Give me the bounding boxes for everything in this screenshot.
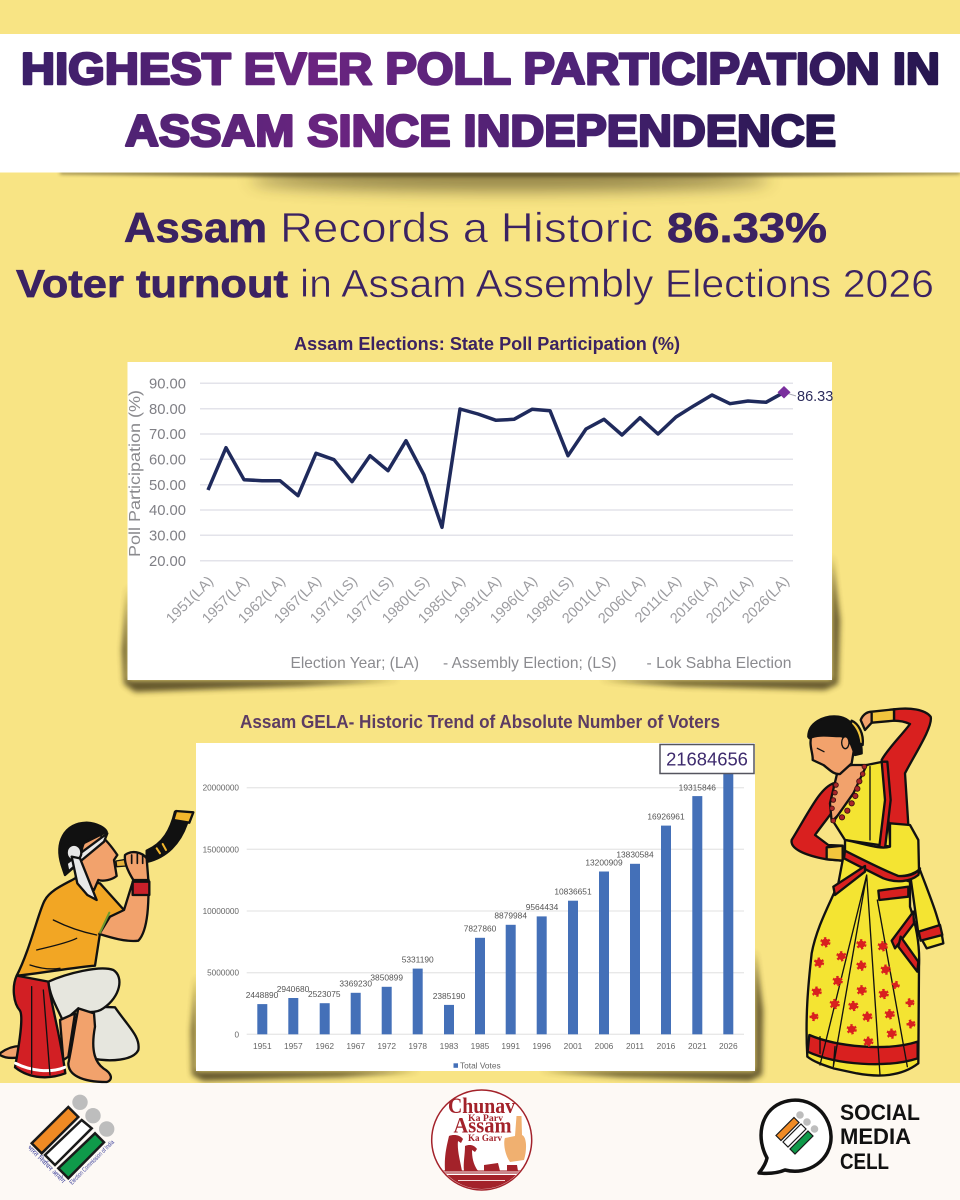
logo: Election Commission of India: भारत निर्वाचन आयोग <box>26 1144 67 1185</box>
subtitle: Voter turnout <box>16 263 288 306</box>
subtitle <box>16 204 934 306</box>
y axis labels: 90.00 <box>149 376 186 392</box>
legend: Total Votes <box>460 1061 501 1071</box>
bar x axis labels: 2021 <box>688 1041 707 1051</box>
x axis labels: 1991(LA) <box>451 574 505 627</box>
y axis labels: 70.00 <box>149 427 186 443</box>
bar value labels: 3369230 <box>339 979 372 989</box>
subtitle: Records a Historic <box>280 204 653 251</box>
bar x axis labels: 1983 <box>440 1041 459 1051</box>
x axis labels <box>163 574 793 627</box>
bar y axis labels: 20000000 <box>203 784 239 793</box>
bar y axis labels <box>203 784 239 1039</box>
bar value labels: 2940680 <box>277 984 310 994</box>
bar value labels: 9564434 <box>526 902 559 912</box>
y axis labels: 80.00 <box>149 402 186 418</box>
bar value labels: 19315846 <box>679 782 716 792</box>
bar value labels: 2448890 <box>246 990 279 1000</box>
x axis labels: 1996(LA) <box>487 574 541 627</box>
title line 2: ASSAM SINCE INDEPENDENCE <box>125 107 836 156</box>
saree flowers <box>811 939 914 1045</box>
x axis labels: 2026(LA) <box>739 574 793 627</box>
illustration: Bihu dancer <box>792 709 943 1076</box>
bar value labels: 2523075 <box>308 989 341 999</box>
bar value labels: 7827860 <box>464 924 497 934</box>
x axis labels: 1957(LA) <box>199 574 253 627</box>
logo: Social Media Cell: MEDIA <box>840 1124 911 1149</box>
bar value labels: 13830584 <box>616 849 654 859</box>
bar x axis labels: 2011 <box>626 1041 644 1051</box>
logo: Chunav Ka Parv Assam Ka Garv: Assam <box>454 1113 512 1138</box>
subtitle: Assam <box>124 204 267 251</box>
bar x axis labels: 2026 <box>719 1041 738 1051</box>
y axis title: Poll Participation (%) <box>127 390 144 557</box>
bar x axis labels: 2016 <box>657 1041 676 1051</box>
x axis labels: 1951(LA) <box>163 574 217 627</box>
line chart heading: Assam Elections: State Poll Participation (%) <box>294 334 680 354</box>
y axis labels: 60.00 <box>149 452 186 468</box>
bar value labels: 3850899 <box>370 972 403 982</box>
bars <box>257 767 733 1034</box>
bar x axis labels: 1996 <box>532 1041 551 1051</box>
x axis labels: 1985(LA) <box>415 574 469 627</box>
x axis labels: 2001(LA) <box>559 574 613 627</box>
subtitle: in Assam Assembly Elections 2026 <box>300 263 934 306</box>
title line 1: HIGHEST EVER POLL PARTICIPATION IN <box>21 45 940 94</box>
logo: Chunav Ka Parv Assam Ka Garv <box>430 1090 534 1195</box>
x axis labels: 1998(LS) <box>523 574 577 627</box>
bar x axis labels: 1991 <box>501 1041 520 1051</box>
footer band <box>0 1083 960 1200</box>
chart footnote: Election Year; (LA) <box>290 655 419 672</box>
subtitle: 86.33% <box>667 204 827 251</box>
bar x axis labels: 1957 <box>284 1041 303 1051</box>
x axis labels: 1971(LS) <box>307 574 361 627</box>
x axis labels: 2006(LA) <box>595 574 649 627</box>
bar y axis labels: 15000000 <box>203 845 239 854</box>
bar value labels: 16926961 <box>647 811 685 821</box>
bar value labels <box>246 782 716 1001</box>
bar x axis labels: 1985 <box>471 1041 490 1051</box>
2026 marker and value: 86.33 <box>797 389 833 405</box>
illustration: man blowing horn <box>0 811 193 1082</box>
bar x axis labels: 2006 <box>595 1041 614 1051</box>
x axis labels: 1977(LS) <box>343 574 397 627</box>
bar y axis labels: 0 <box>234 1030 239 1039</box>
header banner <box>0 34 960 191</box>
logo: Social Media Cell: CELL <box>840 1149 889 1174</box>
logo: Election Commission of India: Election Commission of India <box>68 1139 116 1186</box>
poll participation line <box>208 392 784 527</box>
bar value labels: 5331190 <box>402 955 434 965</box>
chart footnote <box>290 655 792 672</box>
bar x axis labels: 2001 <box>564 1041 583 1051</box>
necklace <box>830 764 867 823</box>
panel: bar chart <box>191 743 763 1081</box>
voting finger <box>504 1116 526 1162</box>
chart footnote: - Assembly Election; (LS) <box>443 655 616 672</box>
y axis labels: 50.00 <box>149 478 186 494</box>
bar x axis labels: 1962 <box>315 1041 334 1051</box>
2026 marker and value <box>778 386 833 405</box>
callout: 2026 votes: 21684656 <box>666 748 748 770</box>
logo: Social Media Cell <box>759 1100 920 1174</box>
logo: Chunav Ka Parv Assam Ka Garv: Ka Parv <box>468 1114 503 1124</box>
y axis labels: 20.00 <box>149 554 186 570</box>
bar x axis labels <box>253 1041 738 1051</box>
logo: Chunav Ka Parv Assam Ka Garv: Ka Garv <box>468 1134 502 1144</box>
bar x axis labels: 1951 <box>253 1041 272 1051</box>
y axis labels <box>149 376 186 570</box>
bar value labels: 2385190 <box>433 991 466 1001</box>
bar value labels: 8879984 <box>494 911 527 921</box>
logo: Chunav Ka Parv Assam Ka Garv: Chunav <box>448 1093 515 1118</box>
x axis labels: 2016(LA) <box>667 574 721 627</box>
x axis labels: 2011(LA) <box>632 574 685 626</box>
x axis labels: 1980(LS) <box>379 574 433 627</box>
bar y axis labels: 10000000 <box>203 907 239 916</box>
callout: 2026 votes <box>660 744 754 774</box>
bar x axis labels: 1967 <box>346 1041 365 1051</box>
y axis labels: 30.00 <box>149 528 186 544</box>
panel: line chart <box>122 362 840 692</box>
painted deer figures <box>445 1135 518 1171</box>
logo: Social Media Cell: SOCIAL <box>840 1100 920 1125</box>
logo: Election Commission of India <box>26 1095 116 1186</box>
bar value labels: 13200909 <box>585 858 623 868</box>
bar x axis labels: 1978 <box>408 1041 427 1051</box>
bar chart heading: Assam GELA- Historic Trend of Absolute Number of Voters <box>240 712 720 732</box>
y axis labels: 40.00 <box>149 503 186 519</box>
bar x axis labels: 1972 <box>377 1041 396 1051</box>
x axis labels: 2021(LA) <box>703 574 757 627</box>
chart footnote: - Lok Sabha Election <box>646 655 792 672</box>
bar value labels: 10836651 <box>554 886 592 896</box>
x axis labels: 1962(LA) <box>235 574 289 627</box>
x axis labels: 1967(LA) <box>271 574 325 627</box>
bar y axis labels: 5000000 <box>207 969 239 978</box>
